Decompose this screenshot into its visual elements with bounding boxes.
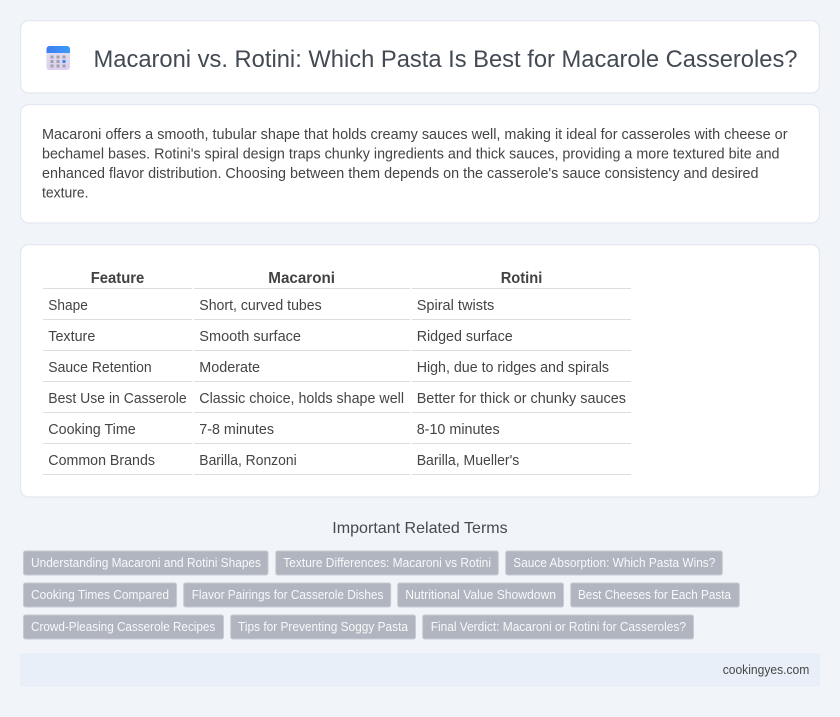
row: shape: Short, curved tubes — [199, 298, 322, 314]
tag — [571, 583, 739, 607]
row: cooking time: 7-8 minutes — [199, 422, 274, 438]
row: texture — [48, 329, 513, 345]
row: cooking time: Cooking Time — [48, 422, 136, 438]
tag: Nutritional Value Showdown — [405, 588, 556, 602]
heading: important related terms: Important Related Terms — [332, 520, 508, 537]
row: common brands — [48, 453, 519, 469]
title: Macaroni vs. Rotini: Which Pasta Is Best for Macarole Casseroles? — [94, 46, 798, 73]
tag — [423, 615, 694, 639]
table header row — [91, 270, 542, 287]
panel: intro paragraph — [21, 105, 819, 223]
tag: Cooking Times Compared — [31, 588, 169, 602]
row: shape — [48, 298, 494, 314]
row: texture: Ridged surface — [417, 329, 513, 345]
tag — [24, 615, 224, 639]
tag: Understanding Macaroni and Rotini Shapes — [31, 556, 261, 570]
tag — [506, 551, 722, 575]
row: sauce retention: High, due to ridges and spirals — [417, 360, 609, 376]
row: best use in casserole — [48, 391, 626, 407]
tag: Best Cheeses for Each Pasta — [578, 588, 731, 602]
panel: comparison table — [21, 245, 819, 497]
row: best use in casserole: Best Use in Casserole — [48, 391, 187, 407]
row: common brands: Barilla, Ronzoni — [199, 453, 297, 469]
table header row: Rotini — [501, 270, 542, 287]
text block: description — [42, 127, 788, 202]
row: sauce retention — [48, 360, 609, 376]
related terms tags — [24, 551, 739, 639]
row: sauce retention: Sauce Retention — [48, 360, 152, 376]
icon: calendar — [46, 46, 70, 70]
row: texture: Smooth surface — [199, 329, 301, 345]
tag — [231, 615, 416, 639]
text block: description: texture. — [42, 186, 88, 202]
tag — [24, 583, 176, 607]
row: best use in casserole: Classic choice, holds shape well — [199, 391, 404, 407]
text block: description: Macaroni offers a smooth, tubular shape that holds creamy sauces well, making it ideal for casseroles with cheese or — [42, 127, 788, 143]
row: common brands: Common Brands — [48, 453, 155, 469]
row: texture: Texture — [48, 329, 95, 345]
footer — [20, 653, 820, 687]
tag: Final Verdict: Macaroni or Rotini for Casseroles? — [431, 620, 686, 634]
tag: Sauce Absorption: Which Pasta Wins? — [513, 556, 715, 570]
row: common brands: Barilla, Mueller's — [417, 453, 519, 469]
text block: description: enhanced flavor distribution. Choosing between them depends on the casserole's sauce consistency and desired — [42, 166, 758, 182]
table header row: Feature — [91, 270, 144, 287]
row: sauce retention: Moderate — [199, 360, 260, 376]
header panel — [21, 21, 819, 93]
table header row: Macaroni — [268, 270, 335, 287]
tag — [398, 583, 564, 607]
tag: Texture Differences: Macaroni vs Rotini — [283, 556, 491, 570]
text block: description: bechamel bases. Rotini's spiral design traps chunky ingredients and thick sauces, providing a more textured bite and — [42, 146, 780, 162]
tag: Flavor Pairings for Casserole Dishes — [192, 588, 383, 602]
row: cooking time: 8-10 minutes — [417, 422, 500, 438]
row: best use in casserole: Better for thick or chunky sauces — [417, 391, 626, 407]
tag — [24, 551, 268, 575]
tag: Crowd-Pleasing Casserole Recipes — [31, 620, 215, 634]
tag — [184, 583, 391, 607]
row: cooking time — [48, 422, 500, 438]
tag — [276, 551, 498, 575]
row: shape: Shape — [48, 298, 88, 314]
tag: Tips for Preventing Soggy Pasta — [238, 620, 408, 634]
footer source text: cookingyes.com — [723, 663, 809, 677]
row: shape: Spiral twists — [417, 298, 494, 314]
